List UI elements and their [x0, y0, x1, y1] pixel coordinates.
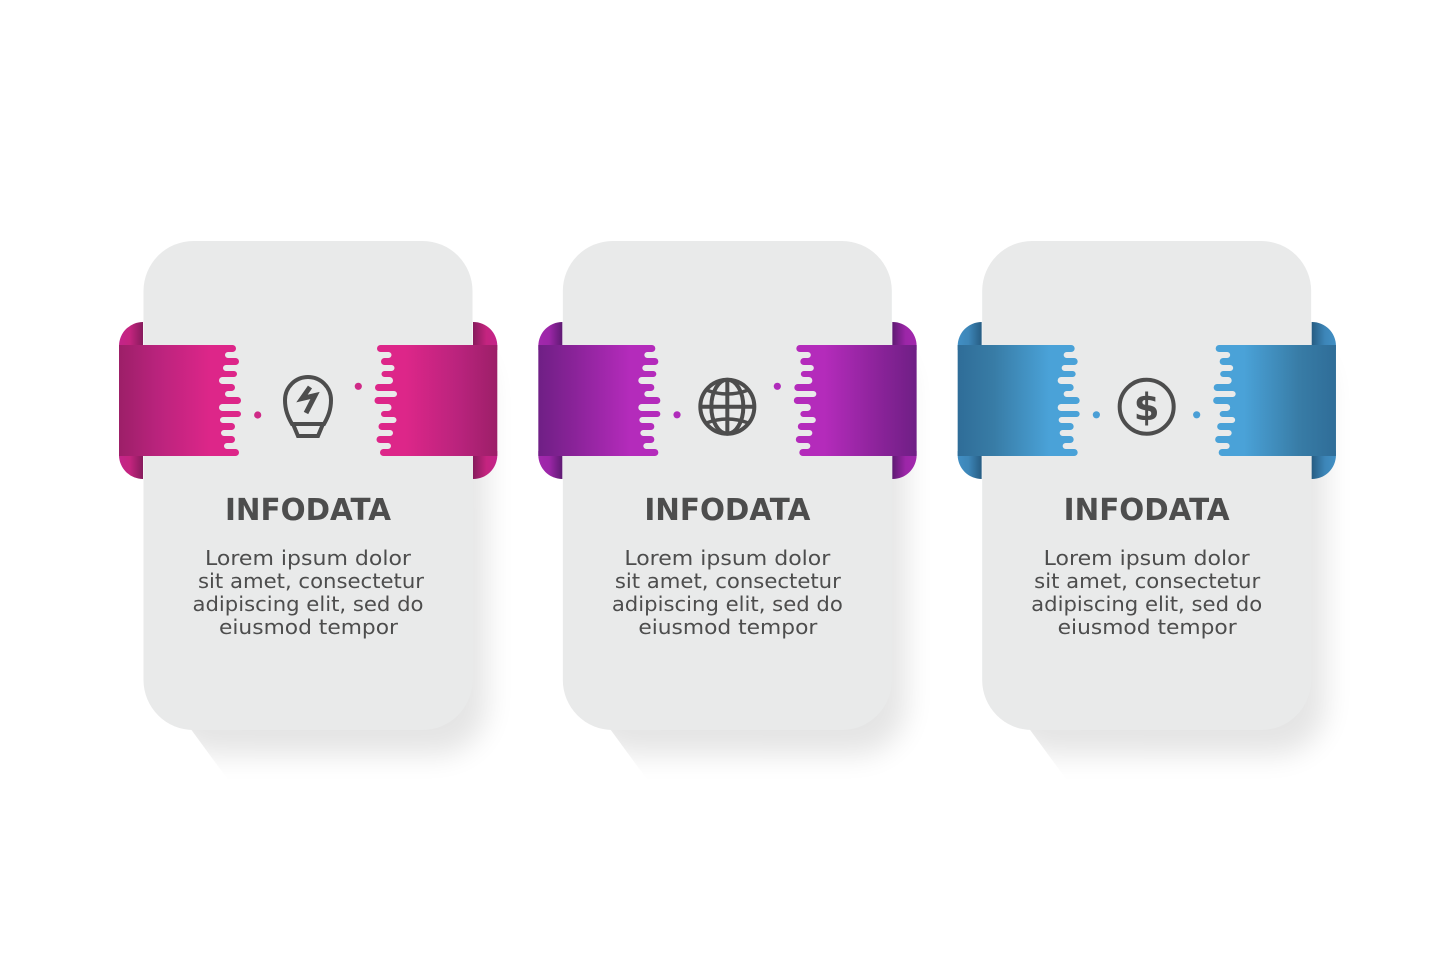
card 1 left ribbon — [119, 345, 241, 456]
card 3 heading: INFODATA — [1064, 493, 1230, 528]
card 2 long shadow — [611, 456, 912, 761]
icon: dollar coin — [1120, 380, 1174, 434]
icon: light bulb — [285, 377, 331, 436]
card 2 heading: INFODATA — [644, 493, 811, 528]
panel: card 1 energy — [119, 241, 497, 755]
card 2 ribbon back tabs — [538, 322, 917, 479]
card 2 body text: sit amet, consectetur — [615, 569, 841, 593]
card 2 dots — [673, 383, 781, 418]
card 3 dots — [1093, 411, 1200, 418]
card 2 left ribbon — [538, 345, 660, 456]
panel: card 3 finance — [958, 241, 1336, 755]
card 2 body text: eiusmod tempor — [638, 615, 818, 639]
card 1 dots — [254, 383, 362, 419]
card 3 body text: sit amet, consectetur — [1034, 569, 1261, 593]
card 3 long shadow — [1030, 456, 1332, 761]
panel: card 2 globe — [538, 241, 917, 755]
card 3 left ribbon — [958, 345, 1080, 456]
card 1 background — [144, 241, 472, 730]
card 1 body text: Lorem ipsum dolor — [205, 546, 412, 570]
card 3 body text: adipiscing elit, sed do — [1031, 592, 1262, 616]
card 1 heading: INFODATA — [225, 493, 392, 528]
icon: dollar coin: $ — [1134, 386, 1160, 429]
card 1 long shadow — [192, 456, 493, 761]
card 1 ribbon back tabs — [119, 322, 497, 479]
card 3 right ribbon — [1213, 345, 1336, 456]
card 3 body text — [1031, 546, 1262, 639]
card 3 body text: Lorem ipsum dolor — [1044, 546, 1250, 570]
card 1 body text: adipiscing elit, sed do — [192, 592, 424, 616]
card 2 body text — [612, 546, 843, 639]
card 2 body text: adipiscing elit, sed do — [612, 592, 843, 616]
card 2 background — [563, 241, 892, 730]
card 1 right ribbon — [375, 345, 497, 456]
card 1 body text: eiusmod tempor — [219, 615, 399, 639]
card 3 background — [982, 241, 1311, 730]
card 3 ribbon back tabs — [958, 322, 1336, 479]
card 1 body text — [192, 546, 425, 639]
card 2 right ribbon — [794, 345, 917, 456]
card 3 body text: eiusmod tempor — [1058, 615, 1237, 639]
card 1 body text: sit amet, consectetur — [198, 569, 425, 593]
icon: globe — [700, 380, 754, 434]
card 2 body text: Lorem ipsum dolor — [624, 546, 831, 570]
